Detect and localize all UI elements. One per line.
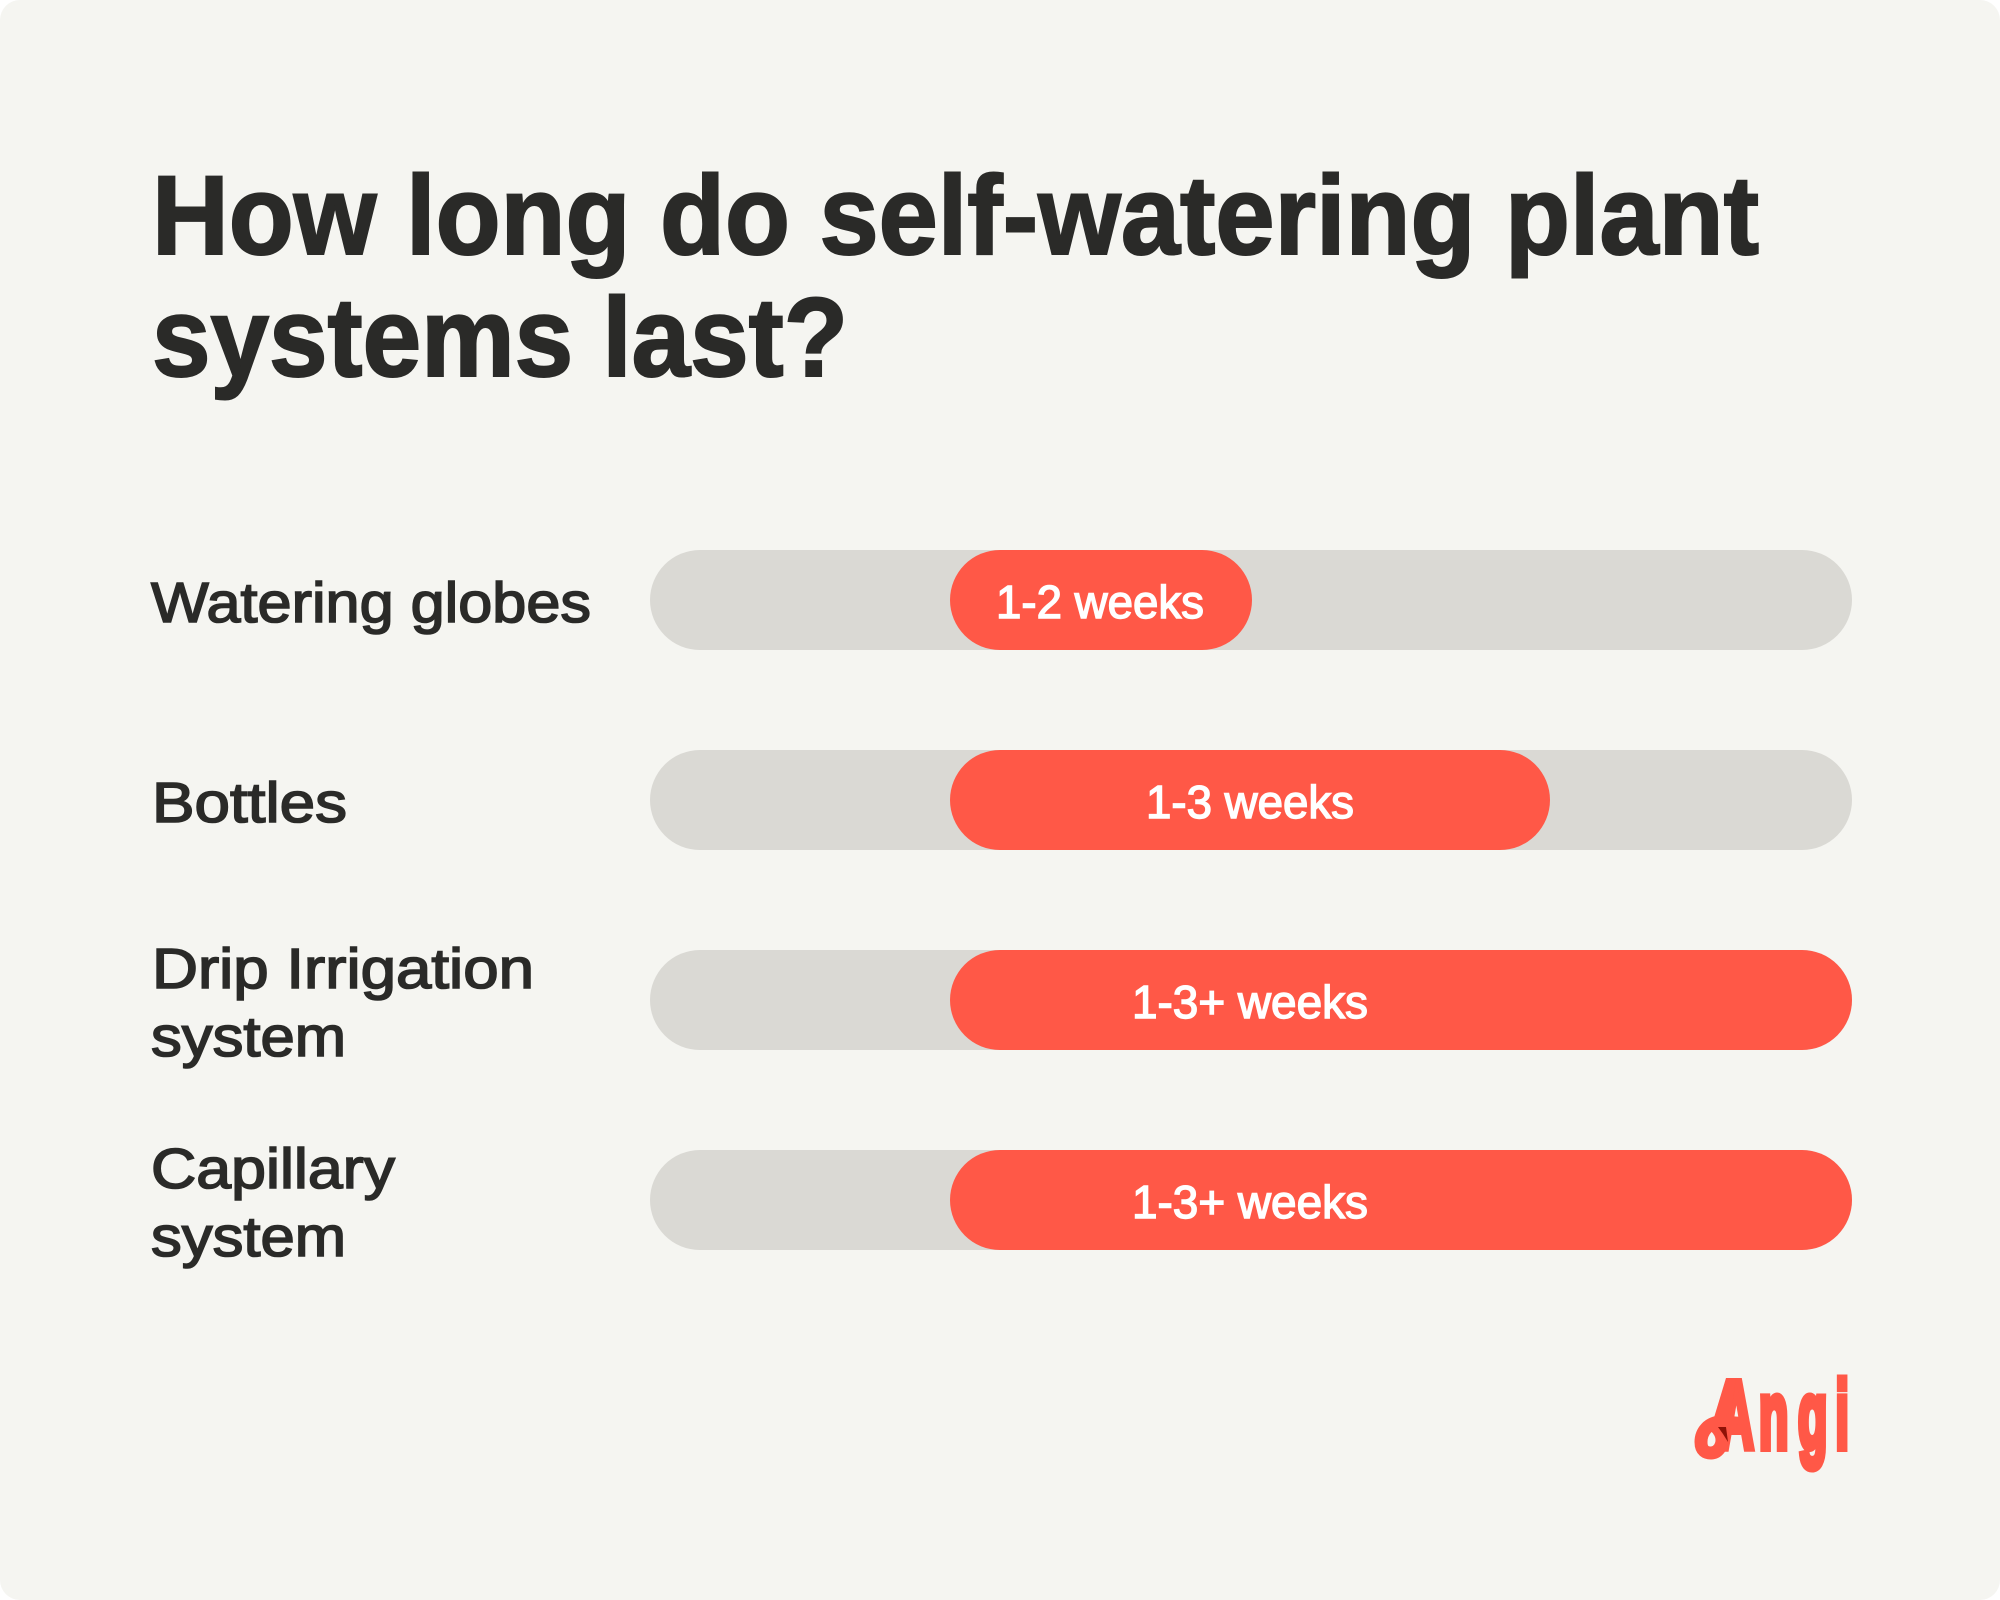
label: Watering globes: Watering globes <box>151 571 591 635</box>
value: 1-3+ weeks: 1-3+ weeks <box>1132 1176 1368 1228</box>
logo: Angi: Angi <box>1719 1362 1849 1470</box>
title <box>152 153 1759 400</box>
value: 1-3+ weeks: 1-3+ weeks <box>1132 976 1368 1028</box>
row: Watering globes <box>151 550 1852 650</box>
bar: 1-3+ weeks <box>950 1150 1852 1250</box>
label: Capillary system <box>151 1137 396 1269</box>
label: Drip Irrigation system: system <box>151 1005 346 1069</box>
title: systems last? <box>152 275 848 400</box>
value: 1-3 weeks: 1-3 weeks <box>1146 776 1354 828</box>
label: Capillary system: system <box>151 1205 346 1269</box>
row: Bottles <box>152 750 1852 850</box>
label: Drip Irrigation system <box>151 937 534 1069</box>
row: Drip Irrigation system <box>151 937 1852 1069</box>
row: Capillary system <box>151 1137 1852 1269</box>
label: Drip Irrigation system: Drip Irrigation <box>152 937 534 1001</box>
track: Capillary system <box>650 1150 1852 1250</box>
bar: 1-2 weeks <box>950 550 1252 650</box>
track: Watering globes <box>650 550 1852 650</box>
title: How long do self-watering plant <box>152 153 1759 278</box>
track: Bottles <box>650 750 1852 850</box>
track: Drip Irrigation system <box>650 950 1852 1050</box>
value: 1-2 weeks: 1-2 weeks <box>996 576 1204 628</box>
label: Capillary system: Capillary <box>151 1137 396 1201</box>
label: Bottles: Bottles <box>152 771 347 835</box>
bar: 1-3+ weeks <box>950 950 1852 1050</box>
bar: 1-3 weeks <box>950 750 1550 850</box>
